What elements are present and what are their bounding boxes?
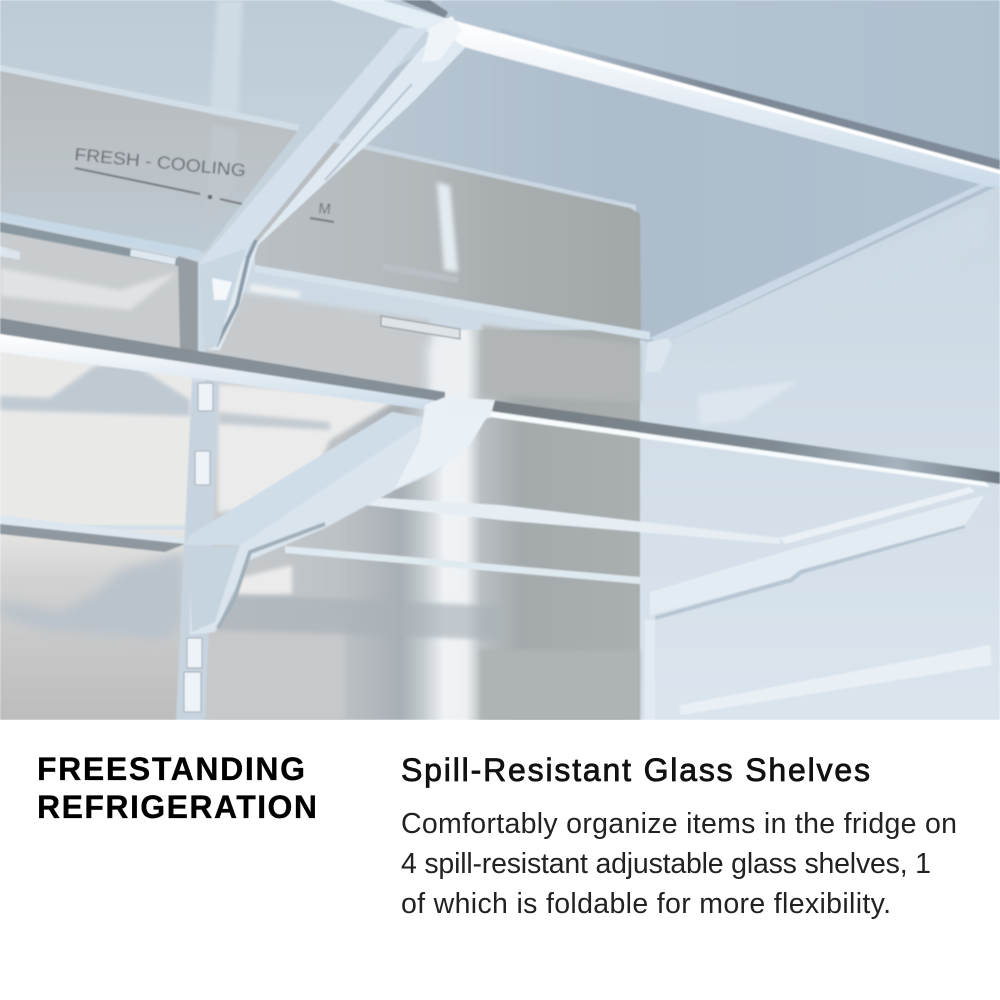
top shelf front white rail <box>445 18 1000 187</box>
lower right shelf back edge <box>490 400 1000 484</box>
text: FRESH - COOLING: FRESH - COOLING <box>74 144 247 180</box>
heading line 1: FREESTANDING <box>37 751 305 787</box>
reflection shadow on left panel <box>0 362 190 416</box>
stainless steel lower back panel <box>205 330 640 720</box>
heading: FREESTANDING REFRIGERATION <box>37 751 317 825</box>
steel lighter bottom right <box>480 650 640 720</box>
bracket shadow line <box>218 524 325 628</box>
glass shelf top left <box>2 2 414 197</box>
upper bracket <box>200 16 465 352</box>
body text <box>401 808 957 920</box>
steel highlight upper <box>437 182 458 272</box>
rear bar 1 <box>365 497 780 544</box>
photo: fridge interior with glass shelves <box>0 0 1000 720</box>
channel slots <box>184 383 213 712</box>
grey rear part seen through glass <box>0 65 300 252</box>
lower right shelf white rail <box>490 411 990 487</box>
bracket hub <box>395 395 490 488</box>
etched dot <box>208 195 212 199</box>
top left dark edge <box>400 0 448 18</box>
slot 2 <box>195 451 210 485</box>
wall rib lower <box>680 645 992 715</box>
bracket diagonal body <box>200 28 428 350</box>
steel mid band right <box>482 325 640 402</box>
glass front edge reflection <box>0 65 300 131</box>
rear slot <box>381 316 460 339</box>
channel strip <box>176 382 219 720</box>
crisper front edge top shelf <box>0 212 200 252</box>
etched underline second <box>220 198 242 205</box>
slot 1 <box>198 383 213 411</box>
upright through glass <box>214 129 234 136</box>
wall post bottom <box>645 620 655 720</box>
back wall above top shelf <box>440 0 1000 160</box>
lower bracket <box>185 395 490 635</box>
steel light zone under upper rail <box>229 292 430 387</box>
body line 1: Comfortably organize items in the fridge on <box>401 808 957 840</box>
top shelf rail highlight <box>500 33 1000 174</box>
bracket foot <box>200 248 246 352</box>
shadow band in bright reflection <box>218 412 330 430</box>
slot 4 <box>184 672 201 712</box>
reflection on upper glass <box>212 1 243 112</box>
slot 3 <box>187 638 202 668</box>
shallow rear slot upper <box>382 263 458 283</box>
rear bar 2 <box>285 546 640 584</box>
steel bright band under upper rail <box>250 284 300 298</box>
right wall soft rib upper <box>700 205 985 350</box>
dark gap near upright <box>178 256 198 352</box>
lower shelf rear bars <box>285 487 975 584</box>
bracket hub <box>422 16 462 62</box>
left lower steel panel <box>0 530 190 720</box>
shadow band in lower reflection <box>215 594 500 640</box>
wall lighter patch <box>700 383 790 423</box>
clip left <box>0 246 20 260</box>
bracket faint seam <box>325 84 412 180</box>
left upper steel panel <box>0 232 180 348</box>
soft steel zone lower <box>208 636 344 720</box>
etched underline <box>75 167 200 195</box>
right interior wall <box>0 0 1000 720</box>
bracket web <box>190 415 490 635</box>
body line 3: of which is foldable for more flexibility. <box>401 888 891 920</box>
top shelf side rail right <box>650 182 992 345</box>
lower shelf joint <box>447 397 495 420</box>
clip under crisper <box>130 249 176 265</box>
lower shelf left rail dark edge <box>0 318 445 404</box>
bracket gloss <box>212 278 232 300</box>
shadow under crisper edge <box>0 222 178 266</box>
back wall seen through top glass shelf <box>300 40 1000 345</box>
heading line 2: REFRIGERATION <box>37 789 317 825</box>
bracket foot <box>188 545 240 632</box>
stainless steel upper back panel <box>255 135 641 336</box>
bright patch upper left <box>0 268 178 310</box>
body line 2: 4 spill-resistant adjustable glass shelves, 1 <box>401 848 931 880</box>
shadow under glass edge <box>0 524 185 552</box>
bracket thin shadow <box>655 525 965 620</box>
bracket diagonal body <box>185 412 428 545</box>
right bracket assembly <box>650 495 985 615</box>
upright channel <box>176 382 219 720</box>
shadow band on lower left panel <box>0 552 185 640</box>
left lower steel panel upper bright <box>0 345 192 525</box>
text: M fragment: M <box>318 200 332 218</box>
lower shelf left white rail <box>0 334 445 412</box>
steel highlight short column <box>424 340 438 390</box>
bracket shadow line <box>216 240 256 346</box>
rear shelf rail upper <box>255 265 650 340</box>
subheading: Spill-Resistant Glass Shelves: Spill-Resistant Glass Shelves <box>401 752 870 788</box>
middle glass edge <box>0 515 185 544</box>
bright reflection under bracket <box>236 565 292 596</box>
etched underline right <box>310 217 334 223</box>
top left shelf rail <box>330 0 448 36</box>
top shelf rear dark edge <box>500 28 1000 172</box>
etched label on crisper <box>74 144 334 223</box>
side rail <box>780 487 975 544</box>
top shelf bracket foot right <box>645 338 672 372</box>
bracket outer web <box>205 30 465 350</box>
bright reflection behind lower bracket <box>218 384 400 512</box>
